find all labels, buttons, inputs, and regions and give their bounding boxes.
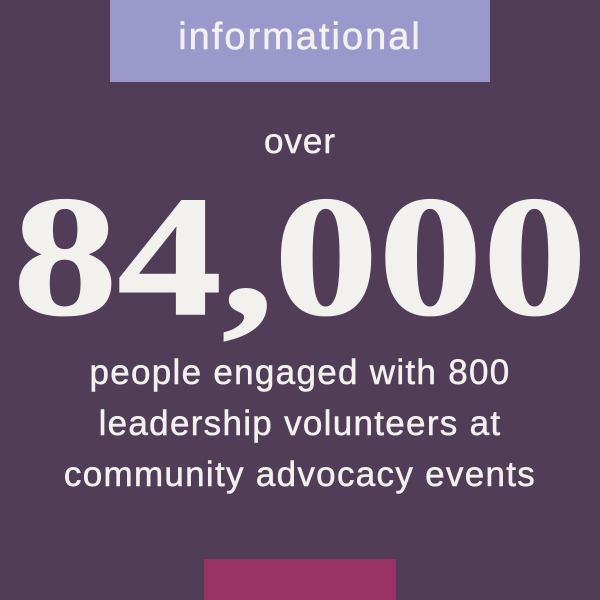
bottom accent bar	[204, 559, 396, 600]
description text: leadership volunteers at	[99, 404, 501, 443]
description text	[64, 353, 536, 494]
description text: people engaged with 800	[89, 353, 511, 392]
tag banner: informational	[110, 0, 490, 82]
text: over: over	[264, 122, 336, 161]
description text: community advocacy events	[64, 455, 536, 494]
banner label: informational	[178, 16, 422, 58]
